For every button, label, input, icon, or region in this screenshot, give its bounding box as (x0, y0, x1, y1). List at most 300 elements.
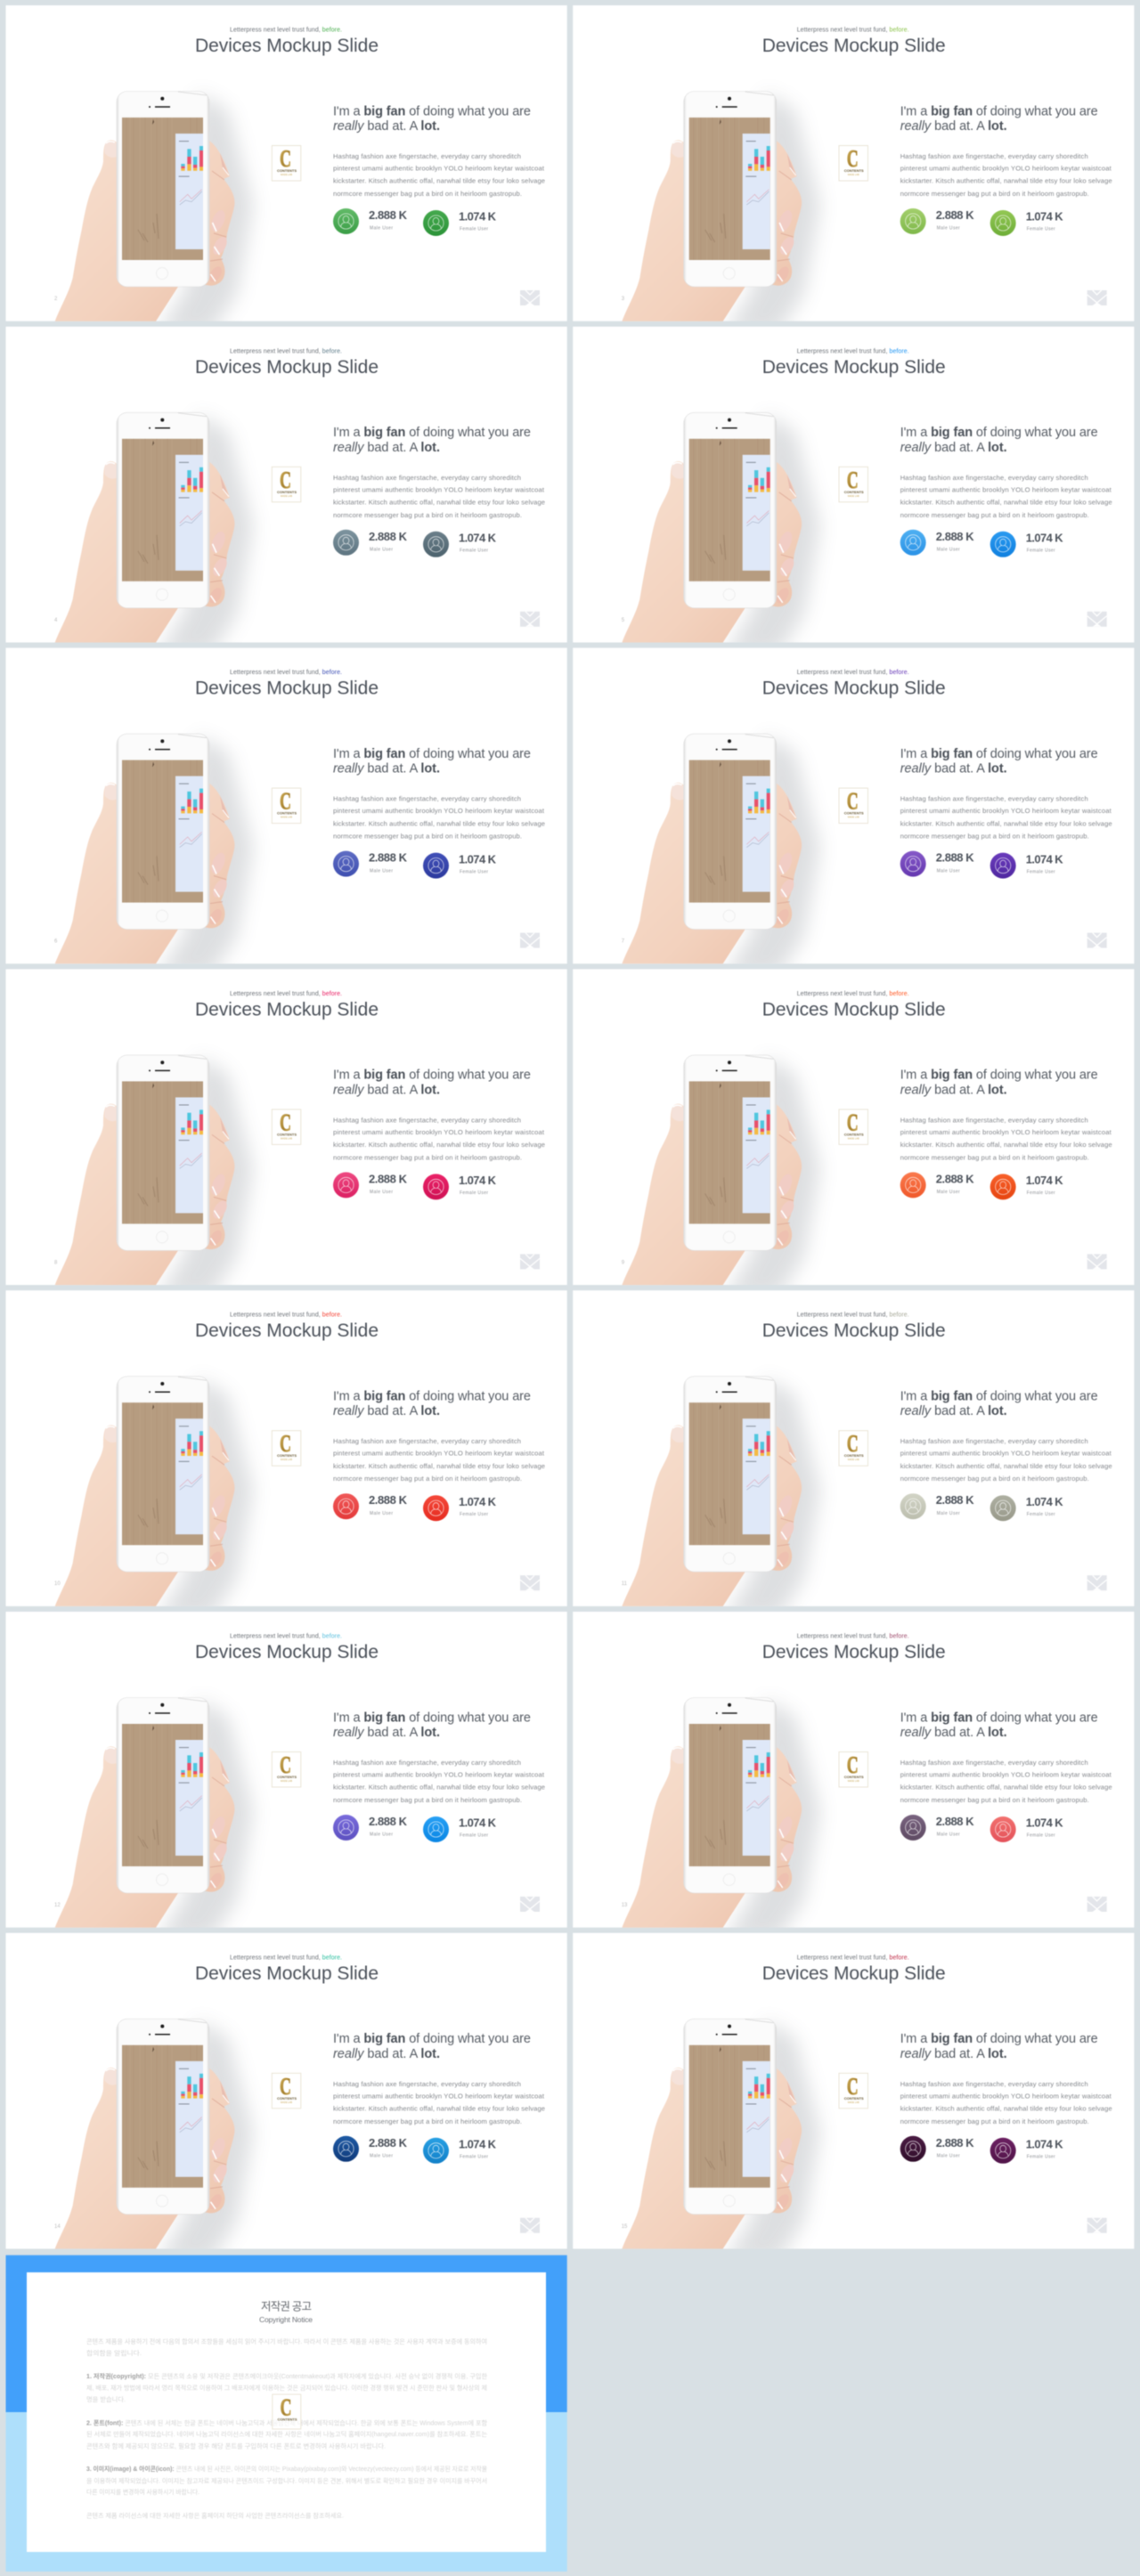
logo badge: CONTENTS (277, 1453, 297, 1458)
icon: female user (423, 1174, 449, 1199)
hand holding phone mockup (622, 2019, 820, 2263)
body text: normcore messenger bag put a bird on it heirloom gastropub. (333, 190, 522, 198)
slide background (573, 1933, 1134, 2249)
body text: kickstarter. Kitsch authentic offal, narwhal tilde etsy four loko selvage (900, 819, 1112, 827)
stat: female user (459, 1495, 497, 1517)
watermark logo (1087, 1254, 1107, 1269)
body text (333, 1116, 545, 1161)
icon: female user (990, 1495, 1016, 1521)
stat: male user: Male User (937, 1190, 960, 1195)
logo badge: MADE LAB (281, 1458, 292, 1461)
panel: slide 13 plum and coral (573, 1612, 1134, 1941)
section 1: copyright (86, 2372, 488, 2403)
body text (900, 474, 1112, 519)
logo badge (272, 1430, 301, 1466)
stat: female user: Female User (1027, 227, 1055, 232)
body text: kickstarter. Kitsch authentic offal, narwhal tilde etsy four loko selvage (333, 819, 545, 827)
body text: kickstarter. Kitsch authentic offal, narwhal tilde etsy four loko selvage (333, 177, 545, 185)
body text: normcore messenger bag put a bird on it heirloom gastropub. (900, 1796, 1089, 1804)
stat: male user (369, 2136, 408, 2158)
body text: pinterest umami authentic brooklyn YOLO heirloom keytar waistcoat (333, 2092, 545, 2100)
hand holding phone mockup (622, 1055, 820, 1298)
title: Devices Mockup Slide (762, 1321, 946, 1341)
body text: Hashtag fashion axe fingerstache, everyday carry shoreditch (900, 795, 1088, 803)
body text: Hashtag fashion axe fingerstache, everyday carry shoreditch (333, 1759, 521, 1767)
body text: normcore messenger bag put a bird on it heirloom gastropub. (333, 1796, 522, 1804)
body text: kickstarter. Kitsch authentic offal, narwhal tilde etsy four loko selvage (333, 2105, 545, 2113)
body text: normcore messenger bag put a bird on it heirloom gastropub. (333, 1153, 522, 1161)
stat: female user (459, 210, 497, 232)
logo badge: CONTENTS (277, 1132, 297, 1136)
body text (333, 1437, 545, 1483)
heading (333, 747, 531, 776)
title: Devices Mockup Slide (195, 1321, 379, 1341)
stat: female user (1026, 531, 1063, 554)
stat: male user: Male User (370, 547, 393, 552)
body text: normcore messenger bag put a bird on it heirloom gastropub. (333, 1475, 522, 1483)
body text: normcore messenger bag put a bird on it heirloom gastropub. (900, 833, 1089, 841)
panel: slide 7 purple (573, 648, 1134, 978)
white notice card (27, 2272, 546, 2552)
stat: female user: 1.074 K (1026, 1174, 1063, 1187)
logo badge: MADE LAB (281, 173, 292, 176)
section 3: image and icon (86, 2465, 488, 2496)
stat: female user: 1.074 K (459, 1495, 497, 1508)
hand holding phone mockup (55, 734, 253, 978)
logo badge: CONTENTS (844, 811, 864, 816)
page number: 4 (54, 618, 58, 623)
body text: kickstarter. Kitsch authentic offal, narwhal tilde etsy four loko selvage (333, 1784, 545, 1792)
logo badge: CONTENTS (844, 168, 864, 173)
heading: I'm a big fan of doing what you are (333, 1389, 531, 1403)
stat: female user (459, 2137, 497, 2160)
stat: female user: 1.074 K (459, 1816, 497, 1830)
slide background (5, 969, 567, 1285)
panel: slide 3 light green (573, 5, 1134, 335)
subtitle: Letterpress next level trust fund, before. (797, 670, 909, 676)
body text: Hashtag fashion axe fingerstache, everyday carry shoreditch (900, 1759, 1088, 1767)
heading: really bad at. A lot. (333, 1404, 440, 1418)
body text: Hashtag fashion axe fingerstache, everyday carry shoreditch (333, 152, 521, 160)
heading: I'm a big fan of doing what you are (900, 1711, 1098, 1725)
panel: slide 15 dark plum (573, 1933, 1134, 2263)
light blue lower background (5, 2412, 567, 2572)
hand holding phone mockup (622, 412, 820, 656)
stat: female user: 1.074 K (459, 1174, 497, 1187)
hand holding phone mockup (622, 1697, 820, 1941)
stat: male user: Male User (370, 2154, 393, 2159)
subtitle: Letterpress next level trust fund, before. (230, 1633, 342, 1640)
logo badge: C (847, 1109, 859, 1135)
subtitle: Letterpress next level trust fund, before. (797, 991, 909, 997)
logo badge (273, 2393, 301, 2429)
body text (333, 1759, 545, 1804)
body text: normcore messenger bag put a bird on it heirloom gastropub. (333, 2117, 522, 2125)
title: Devices Mockup Slide (762, 679, 946, 699)
logo badge: C (280, 1751, 291, 1778)
heading: really bad at. A lot. (333, 441, 440, 455)
icon: female user (423, 210, 449, 236)
panel: slide 8 pink (5, 969, 567, 1298)
body text: pinterest umami authentic brooklyn YOLO heirloom keytar waistcoat (900, 1450, 1112, 1458)
watermark logo (1087, 1897, 1107, 1912)
heading: I'm a big fan of doing what you are (333, 1069, 531, 1083)
slide background (573, 5, 1134, 321)
stat: female user (1026, 2137, 1063, 2160)
stat: male user: 2.888 K (936, 851, 974, 865)
stat: male user: Male User (937, 226, 960, 232)
stat: male user (936, 2136, 974, 2158)
heading (333, 1069, 531, 1097)
watermark logo (1087, 1575, 1107, 1590)
section 3: image and icon: 다른 이미지를 변경하여 사용하시기 바랍니다. (86, 2488, 200, 2496)
icon: male user (333, 208, 359, 234)
stat: male user: 2.888 K (369, 1815, 408, 1828)
stat: male user (369, 1493, 408, 1516)
icon: female user (423, 532, 449, 557)
hand holding phone mockup (55, 1377, 253, 1620)
body text: kickstarter. Kitsch authentic offal, narwhal tilde etsy four loko selvage (900, 1784, 1112, 1792)
section 1: copyright: 제, 배포, 재가 방법에 따라서 영리 목적으로 이용하여 그 배포자에게 이용하는 것은 금지되어 있습니다. 이러한 경쟁 행위 발견 시 준민한 판사 및 형사상의 제 (86, 2384, 487, 2392)
icon: female user (423, 853, 449, 879)
section 2: font: 콘텐츠와 함께 제공되지 않으므로, 필요할 경우 해당 폰트를 구입하여 다른 폰트로 변경하여 사용하시기 바랍니다. (86, 2442, 386, 2450)
title: Devices Mockup Slide (195, 999, 379, 1020)
heading: I'm a big fan of doing what you are (900, 2032, 1098, 2046)
logo badge: C (847, 1430, 859, 1457)
panel: slide 2 green (5, 5, 567, 335)
icon: female user (990, 1816, 1016, 1842)
stat: female user (1026, 1174, 1063, 1196)
watermark logo (520, 1254, 540, 1269)
hand holding phone mockup (622, 91, 820, 335)
watermark logo (520, 1575, 540, 1590)
slide background (573, 327, 1134, 643)
logo badge: MADE LAB (848, 173, 859, 176)
heading (333, 1711, 531, 1740)
stat: female user: Female User (1027, 869, 1055, 874)
stat: female user: Female User (460, 2155, 488, 2160)
watermark logo (520, 933, 540, 948)
logo badge (839, 1109, 867, 1144)
hand holding phone mockup (55, 412, 253, 656)
heading: I'm a big fan of doing what you are (900, 1389, 1098, 1403)
heading: really bad at. A lot. (333, 1726, 440, 1740)
logo badge: MADE LAB (848, 2101, 859, 2104)
logo badge: CONTENTS (277, 811, 297, 816)
stat: female user: 1.074 K (459, 2138, 497, 2151)
page number: 9 (622, 1260, 625, 1265)
stat: female user: Female User (460, 869, 488, 874)
icon: female user (423, 1816, 449, 1842)
body text: kickstarter. Kitsch authentic offal, narwhal tilde etsy four loko selvage (900, 177, 1112, 185)
body text: Hashtag fashion axe fingerstache, everyday carry shoreditch (333, 1116, 521, 1124)
icon: female user (990, 1174, 1016, 1199)
hand holding phone mockup (55, 91, 253, 335)
stat: male user: 2.888 K (369, 1172, 408, 1185)
stat: male user (369, 530, 408, 552)
body text: kickstarter. Kitsch authentic offal, narwhal tilde etsy four loko selvage (900, 498, 1112, 506)
title: Devices Mockup Slide (762, 36, 946, 56)
heading: really bad at. A lot. (900, 441, 1007, 455)
heading (900, 426, 1098, 455)
body text (900, 1116, 1112, 1161)
body text: pinterest umami authentic brooklyn YOLO heirloom keytar waistcoat (900, 807, 1112, 815)
stat: male user: 2.888 K (936, 1493, 974, 1507)
body text: kickstarter. Kitsch authentic offal, narwhal tilde etsy four loko selvage (333, 498, 545, 506)
page number: 6 (54, 939, 58, 945)
icon: male user (900, 1493, 926, 1519)
title: Devices Mockup Slide (762, 999, 946, 1020)
slide background (5, 1290, 567, 1606)
heading: really bad at. A lot. (333, 119, 440, 134)
heading (333, 2032, 531, 2061)
logo badge: C (280, 1430, 291, 1457)
heading: I'm a big fan of doing what you are (900, 426, 1098, 440)
watermark logo (1087, 2218, 1107, 2233)
icon: male user (333, 2136, 359, 2162)
heading: really bad at. A lot. (900, 1726, 1007, 1740)
stat: female user: 1.074 K (1026, 2138, 1063, 2151)
body text: pinterest umami authentic brooklyn YOLO heirloom keytar waistcoat (900, 485, 1112, 493)
notice title: 저작권 공고 (261, 2301, 312, 2313)
panel: slide 11 sage grey (573, 1290, 1134, 1620)
icon: male user (333, 1815, 359, 1841)
heading: I'm a big fan of doing what you are (900, 747, 1098, 761)
body text: normcore messenger bag put a bird on it heirloom gastropub. (333, 833, 522, 841)
heading: I'm a big fan of doing what you are (900, 1069, 1098, 1083)
title: Devices Mockup Slide (195, 1642, 379, 1662)
stat: male user: 2.888 K (369, 2136, 408, 2149)
stat: female user: Female User (460, 1833, 488, 1839)
icon: male user (333, 851, 359, 877)
page number: 3 (622, 297, 625, 302)
logo badge: MADE LAB (848, 494, 859, 498)
stat: female user (1026, 210, 1063, 232)
subtitle: Letterpress next level trust fund, before. (230, 348, 342, 354)
watermark logo (520, 612, 540, 627)
icon: male user (900, 2136, 926, 2162)
body text: Hashtag fashion axe fingerstache, everyday carry shoreditch (333, 795, 521, 803)
stat: male user: Male User (370, 226, 393, 232)
logo badge: MADE LAB (281, 816, 292, 819)
page number: 12 (54, 1903, 61, 1908)
slide background (573, 969, 1134, 1285)
subtitle: Letterpress next level trust fund, before. (797, 1633, 909, 1640)
body text: Hashtag fashion axe fingerstache, everyday carry shoreditch (333, 474, 521, 482)
body text: pinterest umami authentic brooklyn YOLO heirloom keytar waistcoat (333, 807, 545, 815)
panel: slide 5 blue (573, 327, 1134, 656)
body text: pinterest umami authentic brooklyn YOLO heirloom keytar waistcoat (333, 1128, 545, 1136)
hand holding phone mockup (55, 1055, 253, 1298)
heading (900, 1069, 1098, 1097)
icon: male user (333, 1493, 359, 1519)
page number: 14 (54, 2224, 61, 2230)
title: Devices Mockup Slide (195, 679, 379, 699)
page number: 8 (54, 1260, 58, 1265)
stat: female user (459, 531, 497, 554)
body text: Hashtag fashion axe fingerstache, everyday carry shoreditch (900, 152, 1088, 160)
closing note: 콘텐츠 제품 라이선스에 대한 자세한 사항은 홈페이지 하단의 사업한 콘텐츠라이선스를 참조하세요. (86, 2511, 344, 2520)
heading: I'm a big fan of doing what you are (333, 747, 531, 761)
heading: I'm a big fan of doing what you are (333, 1711, 531, 1725)
logo badge: MADE LAB (848, 1779, 859, 1783)
stat: female user: Female User (1027, 1512, 1055, 1517)
body text: kickstarter. Kitsch authentic offal, narwhal tilde etsy four loko selvage (333, 1141, 545, 1149)
hand holding phone mockup (55, 2019, 253, 2263)
heading: really bad at. A lot. (900, 2047, 1007, 2061)
stat: female user: 1.074 K (459, 210, 497, 223)
icon: female user (990, 532, 1016, 557)
stat: female user: 1.074 K (1026, 1816, 1063, 1830)
stat: female user: Female User (1027, 549, 1055, 554)
stat: female user: Female User (1027, 2155, 1055, 2160)
logo badge (839, 2073, 867, 2109)
stat: male user (936, 1172, 974, 1195)
logo badge: MADE LAB (848, 1136, 859, 1140)
logo badge (272, 1751, 301, 1787)
page number: 13 (622, 1903, 628, 1908)
body text: pinterest umami authentic brooklyn YOLO heirloom keytar waistcoat (333, 1450, 545, 1458)
stat: female user (459, 1816, 497, 1839)
subtitle: Letterpress next level trust fund, before. (797, 348, 909, 354)
heading (900, 1711, 1098, 1740)
stat: female user (1026, 1816, 1063, 1839)
icon: male user (900, 1815, 926, 1841)
stat: female user: Female User (1027, 1190, 1055, 1196)
body text: Hashtag fashion axe fingerstache, everyday carry shoreditch (900, 1116, 1088, 1124)
stat: male user: Male User (937, 1511, 960, 1516)
body text: kickstarter. Kitsch authentic offal, narwhal tilde etsy four loko selvage (900, 1462, 1112, 1470)
stat: male user: 2.888 K (369, 851, 408, 865)
heading (900, 2032, 1098, 2061)
stat: male user: 2.888 K (369, 530, 408, 543)
hand holding phone mockup (622, 734, 820, 978)
notice subtitle: Copyright Notice (259, 2315, 313, 2324)
stat: male user: Male User (370, 1190, 393, 1195)
logo badge: C (280, 788, 291, 815)
blue upper background (5, 2255, 567, 2412)
page number: 10 (54, 1581, 61, 1587)
logo badge: C (847, 1751, 859, 1778)
slide background (5, 1933, 567, 2249)
logo badge: CONTENTS (277, 2096, 297, 2101)
stat: female user: Female User (460, 1190, 488, 1196)
logo badge: C (847, 788, 859, 815)
body text: Hashtag fashion axe fingerstache, everyday carry shoreditch (333, 1437, 521, 1445)
body text: normcore messenger bag put a bird on it heirloom gastropub. (900, 2117, 1089, 2125)
icon: male user (900, 851, 926, 877)
slide background (573, 648, 1134, 963)
page number: 15 (622, 2224, 628, 2230)
body text: normcore messenger bag put a bird on it heirloom gastropub. (900, 511, 1089, 519)
watermark logo (1087, 933, 1107, 948)
icon: female user (423, 1495, 449, 1521)
stat: female user (1026, 852, 1063, 874)
stat: female user (1026, 1495, 1063, 1517)
logo badge (839, 788, 867, 824)
logo badge: CONTENTS (278, 2417, 297, 2422)
body text: pinterest umami authentic brooklyn YOLO heirloom keytar waistcoat (900, 1770, 1112, 1779)
hand holding phone mockup (622, 1377, 820, 1620)
title: Devices Mockup Slide (195, 36, 379, 56)
icon: female user (990, 853, 1016, 879)
logo badge (839, 1430, 867, 1466)
subtitle: Letterpress next level trust fund, before. (230, 1954, 342, 1961)
watermark logo (1087, 290, 1107, 305)
section 3: image and icon: 3. 이미지(image) & 아이콘(icon): 콘텐츠 내에 된 사진은, 아이콘의 이미지는 Pixabay(pixabay.com)와 Vecteezy(vecteezy.com) 등에서 제공된 자료로 저작물 (86, 2465, 488, 2473)
logo badge: MADE LAB (848, 816, 859, 819)
heading (900, 1389, 1098, 1418)
logo badge: C (847, 2073, 859, 2100)
logo badge (839, 467, 867, 502)
slide background (573, 1290, 1134, 1606)
page number: 7 (622, 939, 625, 945)
panel: slide 9 deep orange (573, 969, 1134, 1298)
stat: male user: 2.888 K (936, 208, 974, 222)
logo badge: MADE LAB (281, 494, 292, 498)
logo badge: CONTENTS (844, 1453, 864, 1458)
body text: pinterest umami authentic brooklyn YOLO heirloom keytar waistcoat (333, 485, 545, 493)
body text (333, 152, 545, 198)
logo badge: MADE LAB (281, 2101, 292, 2104)
watermark logo (1087, 612, 1107, 627)
icon: male user (333, 530, 359, 556)
logo badge: C (280, 2393, 292, 2420)
stat: female user (459, 1174, 497, 1196)
watermark logo (520, 290, 540, 305)
body text: normcore messenger bag put a bird on it heirloom gastropub. (333, 511, 522, 519)
logo badge: MADE LAB (848, 1458, 859, 1461)
stat: female user (459, 852, 497, 874)
body text: normcore messenger bag put a bird on it heirloom gastropub. (900, 190, 1089, 198)
stat: male user (936, 851, 974, 874)
stat: male user: 2.888 K (936, 530, 974, 543)
stat: male user (936, 1815, 974, 1838)
logo badge (272, 1109, 301, 1144)
hand holding phone mockup (55, 1697, 253, 1941)
logo badge (272, 788, 301, 824)
body text: pinterest umami authentic brooklyn YOLO heirloom keytar waistcoat (900, 164, 1112, 173)
title: Devices Mockup Slide (762, 1963, 946, 1984)
body text (900, 2080, 1112, 2125)
icon: male user (900, 208, 926, 234)
stat: male user (369, 208, 408, 232)
logo badge (839, 145, 867, 181)
logo badge (272, 145, 301, 181)
icon: male user (333, 1172, 359, 1198)
subtitle: Letterpress next level trust fund, before. (230, 1312, 342, 1319)
logo badge (272, 2073, 301, 2109)
subtitle: Letterpress next level trust fund, before. (797, 1312, 909, 1319)
logo badge: CONTENTS (844, 1132, 864, 1136)
intro paragraph (86, 2337, 487, 2357)
logo badge: CONTENTS (844, 2096, 864, 2101)
section 2: font (86, 2418, 488, 2450)
heading (333, 104, 531, 134)
stat: female user: 1.074 K (1026, 531, 1063, 544)
logo badge: C (847, 467, 859, 493)
stat: male user: Male User (937, 868, 960, 874)
stat: male user: 2.888 K (936, 1815, 974, 1828)
panel: slide 4 blue grey (5, 327, 567, 656)
body text (900, 1759, 1112, 1804)
logo badge: CONTENTS (844, 490, 864, 494)
logo badge: C (847, 145, 859, 172)
stat: female user: 1.074 K (1026, 210, 1063, 223)
heading: really bad at. A lot. (333, 762, 440, 776)
body text: pinterest umami authentic brooklyn YOLO heirloom keytar waistcoat (900, 2092, 1112, 2100)
section 3: image and icon: 을 이용하여 제작되었습니다. 이미지는 참고자료 제공되나 콘텐츠이드 구성합니다. 이미지 등은 견본, 위해서 별도로 확인하고 필요한 경우 이미지를 바꾸어서 (86, 2477, 487, 2484)
